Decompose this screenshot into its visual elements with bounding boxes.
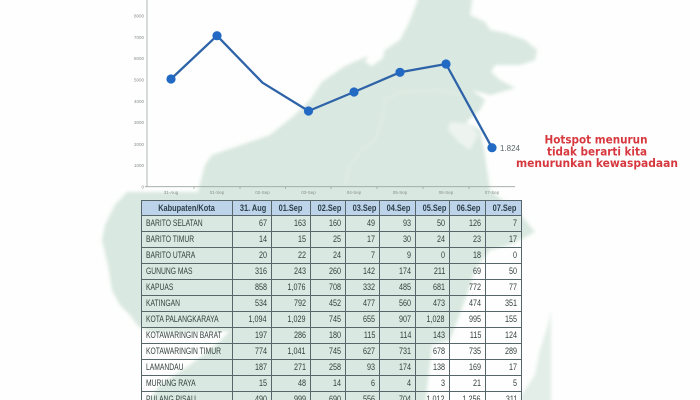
x axis labels: 06-Sep (439, 190, 454, 195)
hotspot data table: 115 (364, 330, 375, 340)
hotspot data table: 25 (333, 234, 341, 244)
red message: tidak berarti kita (547, 144, 647, 158)
axes (145, 0, 515, 189)
x axis labels: 07-Sep (485, 190, 500, 195)
hotspot data table: 04.Sep (387, 202, 410, 212)
hotspot data table: 50 (437, 218, 445, 228)
hotspot data table: 17 (367, 234, 375, 244)
hotspot data table: 50 (509, 266, 517, 276)
line chart (134, 0, 521, 195)
hotspot data table: 708 (329, 282, 341, 292)
hotspot data table: 23 (473, 234, 481, 244)
red message: menurunkan kewaspadaan (516, 156, 678, 170)
hotspot data table: 197 (255, 330, 267, 340)
hotspot data table: 22 (298, 250, 306, 260)
hotspot data table: 735 (469, 346, 481, 356)
hotspot data table: 142 (363, 266, 375, 276)
y axis labels: 7000 (134, 35, 144, 40)
hotspot data table: 332 (363, 282, 375, 292)
hotspot data table: 187 (255, 362, 267, 372)
hotspot data table: 474 (469, 298, 481, 308)
hotspot data table: Kabupaten/Kota (159, 202, 215, 212)
hotspot data table: 126 (469, 218, 481, 228)
hotspot data table: 48 (298, 378, 306, 388)
hotspot data table: KATINGAN (146, 298, 180, 308)
hotspot data table: 02.Sep (318, 202, 341, 212)
y axis labels: 4000 (134, 99, 144, 104)
hotspot data table: 1,094 (249, 314, 267, 324)
map of Kalimantan (102, 0, 551, 400)
hotspot data table: 17 (509, 362, 517, 372)
hotspot data table: 77 (509, 282, 517, 292)
hotspot data table: KOTAWARINGIN TIMUR (146, 346, 221, 356)
hotspot data table: 05.Sep (423, 202, 446, 212)
hotspot data table: 15 (298, 234, 306, 244)
hotspot data table: 7 (513, 218, 517, 228)
hotspot data table: 174 (399, 362, 411, 372)
x axis labels (164, 190, 500, 195)
hotspot data table: 93 (367, 362, 375, 372)
data points (166, 31, 497, 152)
hotspot data table: 14 (259, 234, 267, 244)
hotspot data table: 114 (400, 330, 411, 340)
y axis labels: 6000 (134, 56, 144, 61)
hotspot data table: 07.Sep (493, 202, 516, 212)
hotspot data table: 473 (433, 298, 445, 308)
hotspot data table: 143 (433, 330, 445, 340)
last value label: 1.824 (500, 144, 521, 153)
x axis labels: 31-Aug (164, 190, 179, 195)
hotspot data table: 20 (259, 250, 267, 260)
hotspot data table: 1,028 (427, 314, 445, 324)
hotspot data table: 995 (469, 314, 481, 324)
hotspot data table: 745 (329, 346, 341, 356)
hotspot data table: LAMANDAU (146, 362, 184, 372)
x axis labels: 03-Sep (301, 190, 316, 195)
hotspot data table: 124 (505, 330, 517, 340)
hotspot data table: 289 (505, 346, 517, 356)
hotspot data table: 115 (470, 330, 481, 340)
hotspot data table: 155 (505, 314, 517, 324)
hotspot data table: 258 (329, 362, 341, 372)
hotspot data table: KAPUAS (146, 282, 173, 292)
hotspot data table: 772 (469, 282, 481, 292)
hotspot trend line (171, 36, 492, 148)
hotspot data table: 169 (469, 362, 481, 372)
hotspot data table: 14 (333, 378, 341, 388)
hotspot data table: 211 (434, 266, 445, 276)
hotspot data table: 21 (473, 378, 481, 388)
hotspot data table: 180 (329, 330, 341, 340)
hotspot data table: 681 (433, 282, 445, 292)
hotspot data table: 15 (259, 378, 267, 388)
hotspot data table: 49 (367, 218, 375, 228)
y axis labels: 2000 (134, 142, 144, 147)
hotspot data table: 534 (255, 298, 267, 308)
hotspot data table: 17 (509, 234, 517, 244)
hotspot data table: 655 (363, 314, 375, 324)
hotspot data table: 351 (505, 298, 517, 308)
hotspot data table: 485 (399, 282, 411, 292)
hotspot data table: 174 (399, 266, 411, 276)
hotspot data table: 316 (255, 266, 267, 276)
hotspot data table: 06.Sep (457, 202, 480, 212)
x axis labels: 02-Sep (255, 190, 270, 195)
hotspot data table: 163 (294, 218, 306, 228)
y axis labels (134, 14, 144, 190)
red message: Hotspot menurun (544, 132, 648, 146)
hotspot data table: 271 (294, 362, 306, 372)
hotspot data table: 69 (473, 266, 481, 276)
hotspot data table: 0 (441, 250, 445, 260)
red message (516, 132, 678, 170)
hotspot data table: 477 (363, 298, 375, 308)
hotspot data table: 731 (399, 346, 411, 356)
hotspot data table: KOTA PALANGKARAYA (146, 314, 219, 324)
hotspot data table: 160 (329, 218, 341, 228)
hotspot data table: 67 (259, 218, 267, 228)
hotspot data table: 7 (371, 250, 375, 260)
hotspot data table (141, 200, 522, 400)
hotspot data table: 5 (513, 378, 517, 388)
hotspot data table: BARITO SELATAN (146, 218, 203, 228)
hotspot data table: 858 (255, 282, 267, 292)
hotspot data table: GUNUNG MAS (146, 266, 193, 276)
x axis labels: 05-Sep (393, 190, 408, 195)
hotspot data table: 30 (403, 234, 411, 244)
y axis labels: 8000 (134, 14, 144, 18)
hotspot data table: BARITO TIMUR (146, 234, 194, 244)
hotspot data table: 31. Aug (240, 202, 266, 212)
hotspot data table: 792 (294, 298, 306, 308)
hotspot data table: 745 (329, 314, 341, 324)
hotspot data table: 1,029 (288, 314, 306, 324)
hotspot data table: BARITO UTARA (146, 250, 195, 260)
hotspot data table: 907 (399, 314, 411, 324)
hotspot data table: 1,041 (288, 346, 306, 356)
hotspot data table: 1,076 (288, 282, 306, 292)
hotspot data table: 24 (333, 250, 341, 260)
y axis labels: 5000 (134, 78, 144, 82)
hotspot data table: 678 (433, 346, 445, 356)
hotspot data table: MURUNG RAYA (146, 378, 196, 388)
x axis labels: 01-Sep (210, 190, 225, 195)
hotspot data table: 260 (329, 266, 341, 276)
hotspot data table: KOTAWARINGIN BARAT (146, 330, 222, 340)
hotspot data table: 03.Sep (353, 202, 376, 212)
hotspot data table: 627 (363, 346, 375, 356)
hotspot data table: 286 (294, 330, 306, 340)
hotspot data table: 0 (513, 250, 517, 260)
y axis labels: 3000 (134, 120, 144, 125)
hotspot data table: 4 (407, 378, 411, 388)
hotspot data table: 24 (437, 234, 445, 244)
y axis labels: 0 (141, 184, 144, 190)
hotspot data table: 560 (399, 298, 411, 308)
x axis labels: 04-Sep (347, 190, 362, 195)
y axis labels: 1000 (134, 163, 144, 168)
hotspot data table: 93 (403, 218, 411, 228)
hotspot data table: 452 (329, 298, 341, 308)
hotspot data table: 138 (433, 362, 445, 372)
hotspot data table: 01.Sep (279, 202, 303, 212)
hotspot data table: 6 (371, 378, 375, 388)
hotspot data table: 243 (294, 266, 306, 276)
hotspot data table: 18 (473, 250, 481, 260)
hotspot data table: 9 (407, 250, 411, 260)
hotspot data table: 3 (441, 378, 445, 388)
hotspot data table: 774 (255, 346, 267, 356)
